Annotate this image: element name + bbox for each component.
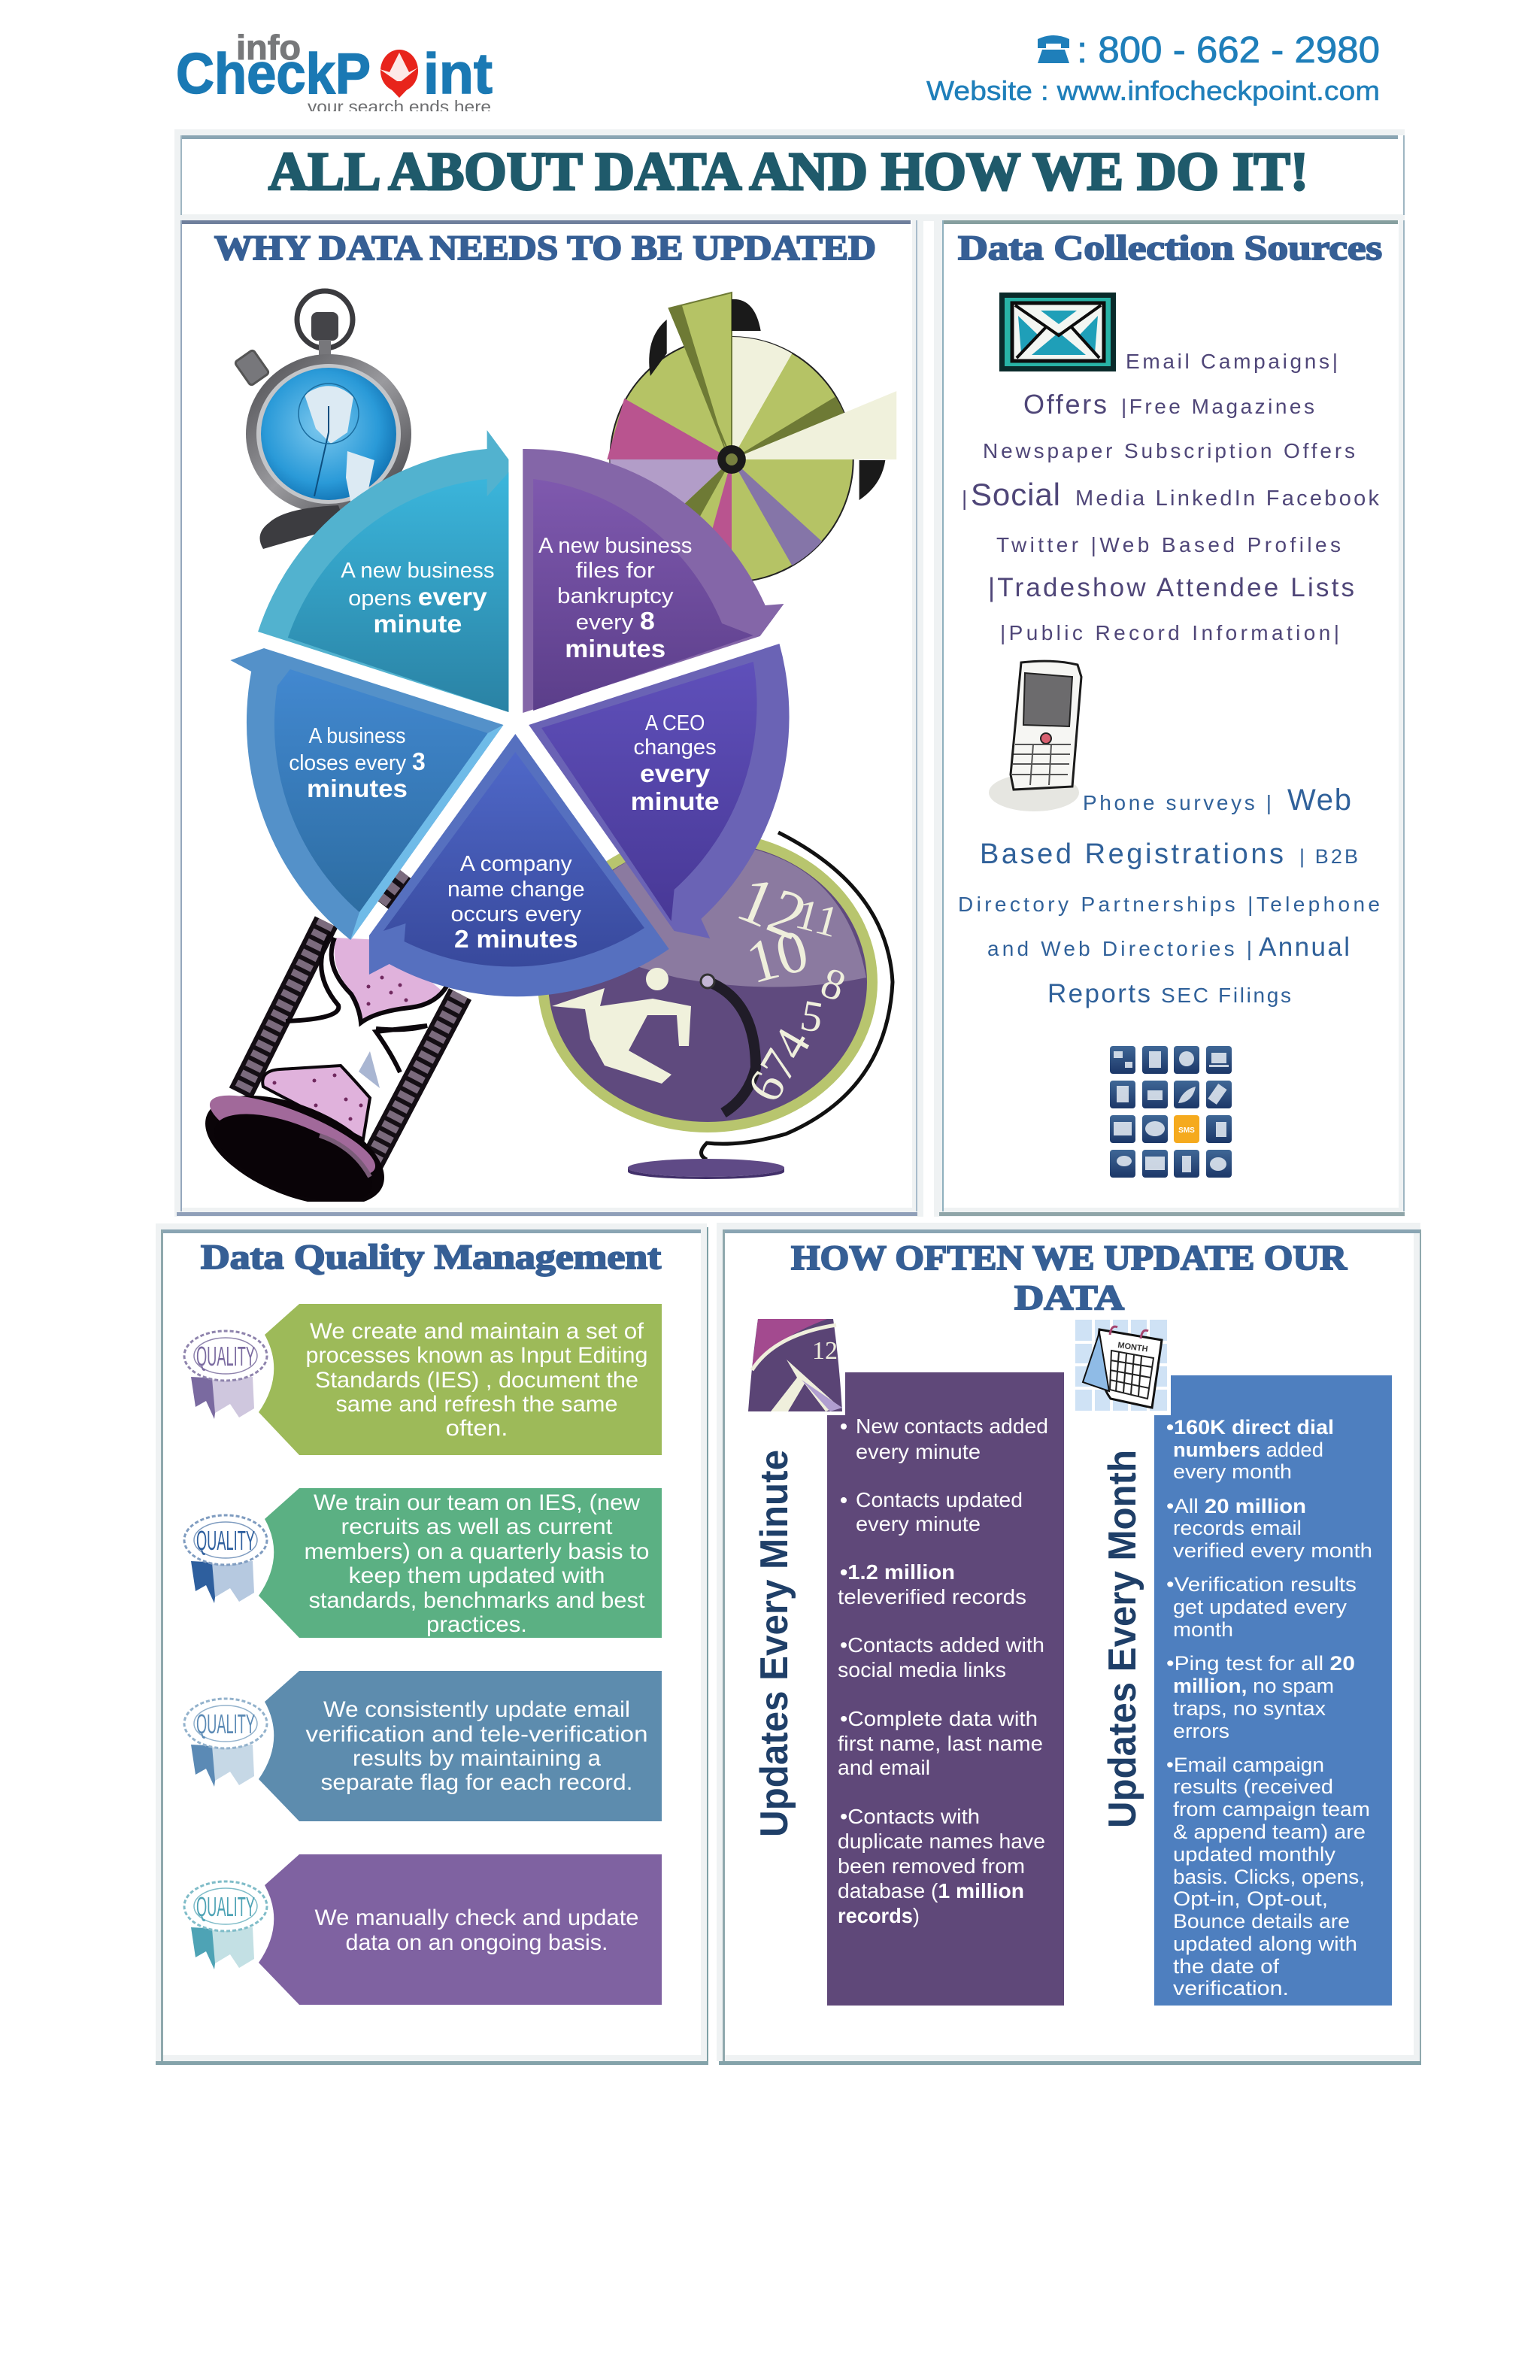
text block: sources part two: SEC Filings [1161,984,1291,1007]
text block: month list: Opt-in, Opt-out, [1173,1887,1328,1910]
text block: month list: records email [1173,1517,1302,1539]
right rail [371,994,460,1164]
panel: title [174,129,1405,221]
arrow: train team: recruits as well as current [341,1514,613,1539]
text block: month list: basis. Clicks, opens, [1173,1866,1365,1888]
segment: bankruptcy: minutes [565,635,665,662]
segment: CEO changes: changes [634,735,717,759]
arrow: train team: members) on a quarterly basis to [304,1539,650,1564]
text block: sources part one: Email Campaigns| [1126,350,1338,373]
icon: running man clock: 674 [737,1019,821,1111]
text block: sources part two: | B2B [1299,845,1358,868]
text block: minute list: •Complete data with [840,1707,1038,1730]
text block: month list: verified every month [1173,1539,1372,1562]
text block: minute list: social media links [838,1658,1006,1681]
text block: minute list: records) [838,1904,920,1927]
heading [791,1239,1348,1317]
heading: Data Quality Management [201,1238,661,1277]
icon: running man clock: 5 [797,990,827,1042]
text block: month list: updated along with [1173,1933,1357,1955]
text block: minute list: Contacts updated [856,1488,1023,1511]
icon: calendar [1075,1320,1167,1411]
arrow: train team: keep them updated with [349,1563,605,1588]
text block: minute list: •1.2 million [840,1560,955,1584]
text block: sources part two: and Web Directories | [987,937,1252,960]
text block: month list: numbers added [1173,1439,1323,1461]
icon: quality ribbon steel blue [184,1699,267,1787]
arrow: manual check [259,1854,662,2005]
text block: minute list: every minute [856,1440,981,1463]
text block: minute list: first name, last name [838,1732,1043,1755]
left rail [241,922,326,1093]
text block: sources part one: Social [971,477,1060,512]
text block: sources part one: Newspaper Subscription Offers [983,439,1355,462]
text block: month list: verification. [1173,1977,1289,2000]
segment: company name change [369,734,669,996]
icon: mobile phone [989,661,1081,811]
arrow: train team [259,1488,662,1638]
text block: sources part one: Media LinkedIn Facebook [1075,487,1379,511]
icon: telephone [1038,35,1069,63]
segment: business closes: closes every 3 [289,747,426,775]
icon: calendar: MONTH [1117,1341,1148,1354]
text block: month list: every month [1173,1460,1292,1483]
text block: minute list: •Contacts with [840,1805,980,1828]
segment: new business opens: minute [373,610,462,638]
arrow: email verification: We consistently update email [323,1697,630,1722]
icon: running man clock: 12 [728,863,816,955]
segment: bankruptcy: bankruptcy [557,584,674,608]
segment: CEO changes [529,644,790,938]
block: updates every minute [748,1319,1064,2006]
icon: clock with arrow [748,1319,842,1411]
logo: InfoCheckPoint [177,34,493,111]
text block: month list: updated monthly [1173,1843,1336,1866]
text block: sources part one: Offers [1023,389,1107,420]
icon: quality ribbon purple: QUALITY [196,1341,255,1372]
text block: month list: •Email campaign [1166,1754,1324,1776]
arrow: input editing standards: often. [445,1416,508,1441]
text block: month list: •All 20 million [1166,1495,1306,1517]
text block: month list: errors [1173,1720,1229,1742]
segment: bankruptcy [523,449,784,713]
text block: month list: •Verification results [1166,1573,1357,1596]
segment: company name change: occurs every [451,902,582,926]
text block: month list: & append team) are [1173,1821,1366,1843]
text block: month list: month [1173,1618,1233,1641]
panel: how often we update our data [717,1223,1421,2065]
label: updates every month: Updates Every Month [1101,1450,1144,1828]
text block: sources part one: |Public Record Information| [1000,621,1339,644]
icon: hourglass [190,872,460,1228]
arrow: manual check: data on an ongoing basis. [346,1930,608,1955]
logo: InfoCheckPoint: int [423,42,493,106]
segment: bankruptcy: every 8 [576,607,655,635]
text block: month list: from campaign team [1173,1798,1370,1821]
text block: month list: the date of [1173,1955,1280,1978]
panel: data collection sources [934,215,1405,1217]
icon: quality ribbon navy: QUALITY [196,1525,255,1556]
icon: quality ribbon teal: QUALITY [196,1891,255,1922]
segment: CEO changes: every [640,759,711,787]
text block: minute list: database (1 million [838,1879,1024,1902]
contact: phone number: : 800 - 662 - 2980 [1077,30,1380,71]
segment: CEO changes: A CEO [645,711,705,735]
text block: sources part one: |Tradeshow Attendee Lists [988,573,1354,602]
icon: running man clock: 8 [815,957,852,1011]
icon: envelope [999,293,1116,371]
text block: sources part two: Directory Partnerships |Telephone [958,893,1380,916]
icon: quality ribbon purple [184,1331,267,1419]
text block: month list: traps, no syntax [1173,1697,1326,1720]
arrow: train team: standards, benchmarks and best [308,1588,645,1613]
text block: minute list: New contacts added [856,1414,1048,1438]
text block: sources part two: Based Registrations [980,838,1284,870]
block: updates every month [1075,1320,1392,2006]
icons: communication grid [1110,1046,1232,1178]
logo: InfoCheckPoint: your search ends here [308,97,491,117]
text block: minute list: been removed from [838,1854,1025,1878]
icon: quality ribbon steel blue: QUALITY [196,1708,255,1739]
icon: quality ribbon navy [184,1515,267,1603]
text block: month list: Bounce details are [1173,1910,1350,1933]
icons: communication grid: SMS [1178,1126,1195,1135]
segment: new business opens: A new business [341,559,495,583]
segment: company name change: A company [460,852,572,876]
segment: business closes: A business [309,724,406,748]
arrow: email verification: verification and tele-verification [305,1722,648,1747]
arrow: email verification: separate flag for each record. [320,1770,633,1795]
text block: minute list: •Contacts added with [840,1633,1044,1657]
text block: sources part one: Twitter |Web Based Profiles [996,533,1341,556]
arrow: train team: We train our team on IES, (new [314,1490,640,1515]
text block: month list: •160K direct dial [1166,1416,1334,1439]
text block: sources part two: Annual [1259,932,1350,962]
text block: sources part two [958,784,1380,1008]
text block: minute list: televerified records [838,1585,1026,1608]
arrow: email verification [259,1671,662,1821]
label: updates every minute: Updates Every Minute [753,1450,796,1837]
icon: running man clock: 10 [740,917,815,996]
text block: month list: get updated every [1173,1596,1348,1618]
heading: HOW OFTEN WE UPDATE OUR [791,1239,1348,1278]
contact: website: Website : www.infocheckpoint.com [926,75,1380,106]
icon: running man clock [538,832,893,1179]
text block: month list: results (received [1173,1775,1333,1798]
icon: stopwatch globe [235,291,411,549]
segment: company name change: name change [447,878,585,902]
arrow: input editing standards: Standards (IES) , document the [315,1368,638,1393]
icon: running man clock: 11 [791,889,844,947]
icon: spinning clock wheel [607,293,900,582]
arrow: train team: practices. [426,1612,527,1637]
panel: why data needs to be updated [174,215,923,1228]
arrow: input editing standards: same and refresh the same [335,1392,618,1417]
heading: Data Collection Sources [958,229,1382,268]
arrow: manual check: We manually check and update [314,1906,639,1930]
text block: sources part two: Web [1287,784,1351,817]
chart: five-part cycle diagram [230,430,790,996]
arrow: input editing standards: processes known as Input Editing [305,1343,648,1368]
arrow: input editing standards: We create and maintain a set of [310,1319,644,1344]
segment: bankruptcy: A new business [538,534,692,558]
segment: new business opens [258,430,508,712]
segment: CEO changes: minute [631,787,720,815]
arrow: email verification: results by maintaining a [353,1746,601,1771]
segment: bankruptcy: files for [576,559,655,583]
segment: company name change: 2 minutes [454,925,578,953]
arrow: input editing standards [259,1304,662,1455]
heading: DATA [1014,1278,1124,1317]
text block: month list: •Ping test for all 20 [1166,1652,1355,1675]
text block: sources part one: |Free Magazines [1121,395,1314,418]
text block: minute list: duplicate names have [838,1830,1045,1853]
text block: minute list [838,1414,1048,1927]
logo: InfoCheckPoint: CheckP [176,42,371,106]
text block: sources part two: Phone surveys | [1083,791,1272,814]
icon: clock with arrow: 12 [812,1337,838,1365]
text block: minute list: every minute [856,1512,981,1536]
segment: business closes [230,648,503,940]
text block: month list: million, no spam [1173,1675,1334,1697]
heading: WHY DATA NEEDS TO BE UPDATED [214,229,876,268]
text block: month list [1166,1416,1372,2000]
text block: sources part one: | [962,487,967,510]
text block: sources part two: Reports [1047,979,1150,1008]
segment: business closes: minutes [307,775,408,802]
panel: data quality management [156,1223,708,2065]
text block: minute list: and email [838,1756,930,1779]
segment: new business opens: opens every [348,583,487,611]
title: ALL ABOUT DATA AND HOW WE DO IT! [268,141,1308,202]
icon: quality ribbon teal [184,1881,267,1969]
text block: sources part one [962,350,1379,644]
logo: InfoCheckPoint: info [236,28,301,67]
